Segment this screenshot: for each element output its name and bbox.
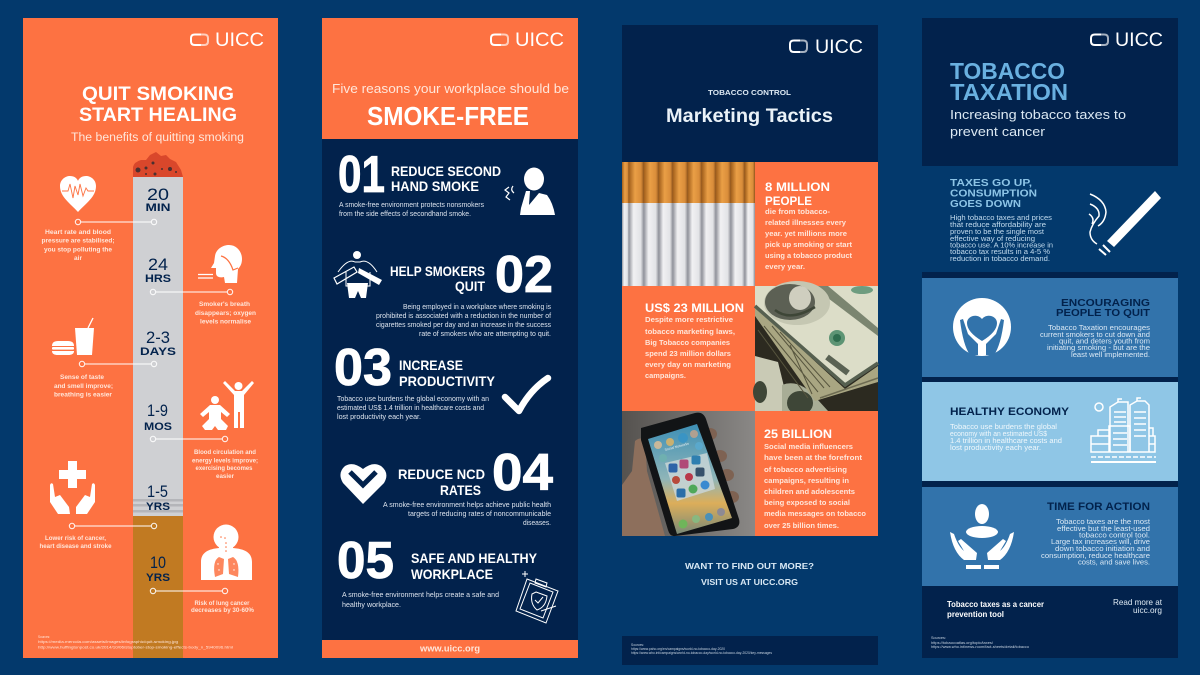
reason 05: healthy workplace. <box>342 600 401 609</box>
sources <box>622 636 878 665</box>
image: phone <box>622 411 755 536</box>
text: breath: Smoker's breath <box>199 301 250 308</box>
time labels: 20 <box>147 185 169 204</box>
section: time for action: down tobacco initiation and <box>1055 546 1150 553</box>
section: taxes go up: tobacco tax results in a 4-5 % <box>950 249 1050 256</box>
text: breath: disappears; oxygen <box>195 310 256 317</box>
time labels: 24 <box>148 255 168 274</box>
logo: UICC <box>491 30 564 51</box>
section: healthy economy: HEALTHY ECONOMY <box>950 406 1070 418</box>
icon: city <box>1091 398 1156 462</box>
section: taxes go up: reduction in tobacco demand. <box>950 256 1050 263</box>
reason 05: WORKPLACE <box>411 566 493 582</box>
header band <box>322 18 578 139</box>
section: taxes go up <box>922 166 1178 272</box>
time labels: 10 <box>150 553 166 572</box>
section: time for action <box>922 487 1178 586</box>
panel: smoke-free <box>322 18 578 658</box>
text: lung cancer: Risk of lung cancer <box>194 600 250 607</box>
text: heart rate: air <box>74 255 83 262</box>
time labels <box>140 185 176 584</box>
title: SMOKE-FREE <box>367 101 529 131</box>
cell: 8 million people: 8 MILLION <box>765 180 830 194</box>
cell: US$ 23 million: Big Tobacco companies <box>645 338 730 347</box>
section: time for action: TIME FOR ACTION <box>1047 501 1150 513</box>
section: taxes go up: CONSUMPTION <box>950 188 1037 200</box>
icon: exercising people <box>200 381 254 430</box>
reason 05: A smoke-free environment helps create a safe and <box>342 590 499 599</box>
title: TOBACCO <box>950 58 1065 84</box>
text: breath: levels normalise <box>200 318 252 326</box>
sources: Sources: <box>931 636 946 640</box>
reason 02 <box>334 246 553 338</box>
call to action <box>685 561 814 587</box>
sources: https://tobaccoatlas.org/topic/taxes/ <box>931 641 994 645</box>
reason 03: 03 <box>334 339 392 397</box>
image: dollar bills <box>753 281 878 415</box>
cell: 25 billion: have been at the forefront <box>764 453 863 462</box>
sources: Sources: <box>38 634 50 639</box>
subtitle: prevent cancer <box>950 124 1046 139</box>
text: taste: and smell improve; <box>54 383 113 390</box>
read more: Read more at <box>1113 597 1163 607</box>
reason 04: A smoke-free environment helps achieve public health <box>383 500 551 509</box>
text: taste: Sense of taste <box>60 374 105 381</box>
cell: US$ 23 million <box>622 286 755 411</box>
reason 02: 02 <box>495 246 553 304</box>
cell: 8 million people: die from tobacco- <box>765 207 831 216</box>
icon: cigarette with smoke <box>1089 191 1161 255</box>
icon: cross and hands <box>50 461 95 514</box>
icon: person in hands <box>950 504 1014 569</box>
sources: https://www.who.int/campaigns/world-no-tobacco-day/world-no-tobacco-day-2020/key-messages <box>631 651 772 655</box>
icon: lungs <box>201 524 252 580</box>
section: encouraging people to quit: initiating smoking - but are the <box>1047 345 1150 352</box>
cell: 8 million people: using a tobacco product <box>765 251 852 260</box>
text: heart rate: pressure are stabilised; <box>42 238 114 245</box>
reason 01: 01 <box>338 146 385 204</box>
reason 01: REDUCE SECOND <box>391 163 501 179</box>
time labels: YRS <box>146 501 170 513</box>
cell: 8 million people: PEOPLE <box>765 194 812 208</box>
section: healthy economy: economy with an estimated US$ <box>950 431 1047 438</box>
reason 04 <box>340 444 553 527</box>
time labels: 1-5 <box>147 482 168 501</box>
reason 03: lost productivity each year. <box>337 412 421 421</box>
icon: check mark <box>505 378 548 411</box>
sources: Sources: <box>631 643 644 647</box>
reason 05: 05 <box>337 532 394 590</box>
title: START HEALING <box>79 105 237 126</box>
reason 04: 04 <box>492 444 553 502</box>
reason 03: PRODUCTIVITY <box>399 373 496 389</box>
title: QUIT SMOKING <box>82 84 234 105</box>
time labels: MOS <box>144 421 172 433</box>
time labels: 1-9 <box>147 401 168 420</box>
text: lower risk <box>40 535 112 550</box>
kicker: TOBACCO CONTROL <box>708 88 791 97</box>
sources <box>931 636 1029 649</box>
icon: heart check <box>340 464 386 504</box>
cell: 25 billion: Social media influencers <box>764 442 853 451</box>
section: time for action: consumption, reduce healthcare <box>1041 553 1150 560</box>
section: taxes go up: that reduce affordability are <box>950 222 1046 229</box>
panel: marketing tactics <box>622 25 878 665</box>
subtitle: The benefits of quitting smoking <box>71 132 244 144</box>
section: time for action: Large tax increases will, drive <box>1051 539 1150 546</box>
cell: 25 billion: being exposed to social <box>764 498 850 507</box>
section: taxes go up: High tobacco taxes and prices <box>950 215 1053 222</box>
icon: coughing person <box>505 168 555 215</box>
connector lines <box>69 219 233 594</box>
section: healthy economy: Tobacco use burdens the global <box>950 424 1057 431</box>
text: circulation <box>192 449 258 480</box>
time labels: DAYS <box>140 346 176 358</box>
reason 02: cigarettes smoked per day and an increase in the success <box>376 320 551 329</box>
reason 03 <box>334 339 548 421</box>
text: circulation: easier <box>216 473 235 480</box>
logo: UICC <box>790 37 863 58</box>
text: lower risk: Lower risk of cancer, <box>45 535 106 542</box>
text: lower risk: heart disease and stroke <box>40 543 112 550</box>
text: taste <box>54 374 113 399</box>
reason 04: diseases. <box>523 518 551 527</box>
reason 01: A smoke-free environment protects nonsmokers <box>339 200 484 209</box>
cell: US$ 23 million: campaigns. <box>645 371 686 380</box>
panel: quit smoking <box>23 18 278 658</box>
reason 02: QUIT <box>455 278 485 294</box>
section: healthy economy <box>922 382 1178 481</box>
time labels: MIN <box>146 202 171 214</box>
text: heart rate: you stop polluting the <box>44 246 113 253</box>
image: cigarettes <box>622 162 755 286</box>
section: time for action: effective but the least-used <box>1057 526 1150 533</box>
text: breath <box>195 301 256 326</box>
text: taste: breathing is easier <box>54 392 113 399</box>
reason 02: HELP SMOKERS <box>390 263 485 279</box>
read more <box>1113 597 1163 615</box>
call to action: VISIT US AT UICC.ORG <box>701 577 798 587</box>
icon: hands holding heart <box>953 298 1011 356</box>
text: lung cancer <box>191 600 254 614</box>
read more: uicc.org <box>1133 605 1162 615</box>
cigarette timeline <box>133 152 183 658</box>
cell: 25 billion: 25 BILLION <box>764 427 832 441</box>
subtitle: Increasing tobacco taxes to <box>950 107 1126 122</box>
reason 01: from the side effects of secondhand smoke. <box>339 209 471 218</box>
logo: UICC: UICC <box>1115 30 1163 51</box>
reason 02: rate of smokers who are attempting to quit. <box>419 329 551 338</box>
icon: clipboard shield <box>516 571 558 623</box>
reason 04: RATES <box>440 482 481 498</box>
logo: UICC <box>191 30 264 51</box>
section: encouraging people to quit: least well implemented. <box>1071 352 1150 359</box>
title: Marketing Tactics <box>666 106 833 127</box>
header band <box>622 25 878 162</box>
text: circulation: exercising becomes <box>196 465 253 472</box>
cell: US$ 23 million: tobacco marketing laws, <box>645 327 735 336</box>
reason 02: Being employed in a workplace where smoking is <box>403 302 551 311</box>
sources <box>38 634 233 650</box>
time labels: 2-3 <box>146 328 170 347</box>
section: time for action: costs, and save lives. <box>1078 560 1150 566</box>
text: circulation: energy levels improve; <box>192 458 258 464</box>
text: heart rate: Heart rate and blood <box>45 229 111 236</box>
reason 05 <box>337 532 558 623</box>
subtitle: Five reasons your workplace should be <box>332 81 569 96</box>
section: taxes go up: TAXES GO UP, <box>950 177 1032 189</box>
icon: man breaking cigarette <box>334 251 382 298</box>
section: encouraging people to quit: quit, and deters youth from <box>1059 338 1150 346</box>
cell: 8 million people: year. yet millions more <box>765 229 847 238</box>
reason 03: INCREASE <box>399 357 463 373</box>
text: circulation: Blood circulation and <box>194 449 256 456</box>
time labels: YRS <box>146 572 170 584</box>
cell: 25 billion: children and adolescents <box>764 487 855 496</box>
sources: https://www.who.int/news-room/fact-sheets/detail/tobacco <box>931 645 1029 649</box>
section: encouraging people to quit: PEOPLE TO QUIT <box>1056 307 1151 319</box>
sources: http://www.huffingtonpost.co.uk/2014/10/06/stoptober-stop-smoking-effects-body_n_5940096.html <box>38 644 233 650</box>
logo: UICC: UICC <box>815 37 863 58</box>
time labels: HRS <box>145 273 171 285</box>
logo: UICC: UICC <box>515 30 564 51</box>
cell: 8 million people: every year. <box>765 262 805 271</box>
section: encouraging people to quit <box>922 278 1178 377</box>
image: phone: Social Networks <box>664 442 690 452</box>
title: TAXATION <box>950 79 1068 105</box>
sources: https://media.mercola.com/assets/images/infographic/quit-smoking.jpg <box>38 639 178 644</box>
reason 03: Tobacco use burdens the global economy with an <box>337 394 489 403</box>
cell: 25 billion: campaigns, resulting in <box>764 476 849 485</box>
reason 03: estimated US$ 1.4 trillion in healthcare costs and <box>337 403 484 412</box>
cell: US$ 23 million: spend 23 million dollars <box>645 349 731 358</box>
logo: UICC <box>1091 30 1163 51</box>
cell: 8 million people: pick up smoking or start <box>765 240 852 249</box>
section: time for action: Tobacco taxes are the most <box>1056 519 1150 526</box>
section: taxes go up: tobacco use. A 10% increase in <box>950 242 1053 250</box>
cell: 25 billion <box>755 411 878 536</box>
cell: 25 billion: over 25 billion times. <box>764 521 839 530</box>
title <box>79 84 237 126</box>
cell: 8 million people <box>755 162 878 286</box>
sources: https://www.paho.org/en/campaigns/world-no-tobacco-day-2020 <box>631 647 725 651</box>
footer note <box>947 599 1045 619</box>
cell: US$ 23 million: every day on marketing <box>645 360 731 369</box>
subtitle <box>950 107 1126 139</box>
cell: US$ 23 million: Despite more restrictive <box>645 315 733 324</box>
panel: tobacco taxation <box>922 18 1178 658</box>
cell: 8 million people: related illnesses every <box>765 218 847 227</box>
reason 04: targets of reducing rates of noncommunicable <box>408 509 551 518</box>
footer band: www.uicc.org <box>419 644 480 654</box>
section: taxes go up: proven to be the single most <box>950 229 1044 236</box>
call to action: WANT TO FIND OUT MORE? <box>685 561 814 571</box>
section: healthy economy: lost productivity each year. <box>950 445 1041 452</box>
cigarette ash <box>133 152 183 177</box>
section: taxes go up: effective way of reducing <box>950 236 1035 243</box>
reason 01: HAND SMOKE <box>391 178 479 194</box>
cell: 25 billion: media messages on tobacco <box>764 509 866 518</box>
cell: US$ 23 million: US$ 23 MILLION <box>645 301 744 315</box>
text: heart rate <box>42 229 114 262</box>
icon: burger and drink <box>52 318 94 355</box>
text: lung cancer: decreases by 30-60% <box>191 607 254 614</box>
footer note: prevention tool <box>947 609 1004 619</box>
cell: 25 billion: of tobacco advertising <box>764 465 847 474</box>
icon: exhaling head <box>198 245 242 283</box>
reason 05: SAFE AND HEALTHY <box>411 550 538 566</box>
title <box>950 58 1068 105</box>
reason 04: REDUCE NCD <box>398 466 485 482</box>
section: encouraging people to quit: Tobacco Taxation encourages <box>1048 325 1151 332</box>
reason 01 <box>338 146 555 218</box>
reason 02: prohibited is associated with a reduction in the number of <box>376 311 552 320</box>
section: taxes go up: GOES DOWN <box>950 198 1021 210</box>
section: healthy economy: 1.4 trillion in healthcare costs and <box>950 438 1062 445</box>
section: encouraging people to quit: ENCOURAGING <box>1061 297 1150 309</box>
section: time for action: tobacco control tool. <box>1079 532 1150 540</box>
logo: UICC: UICC <box>215 30 264 51</box>
icon: heart <box>60 176 96 212</box>
footer band <box>322 640 578 658</box>
section: encouraging people to quit: current smokers to cut down and <box>1040 332 1150 339</box>
footer note: Tobacco taxes as a cancer <box>947 599 1045 609</box>
